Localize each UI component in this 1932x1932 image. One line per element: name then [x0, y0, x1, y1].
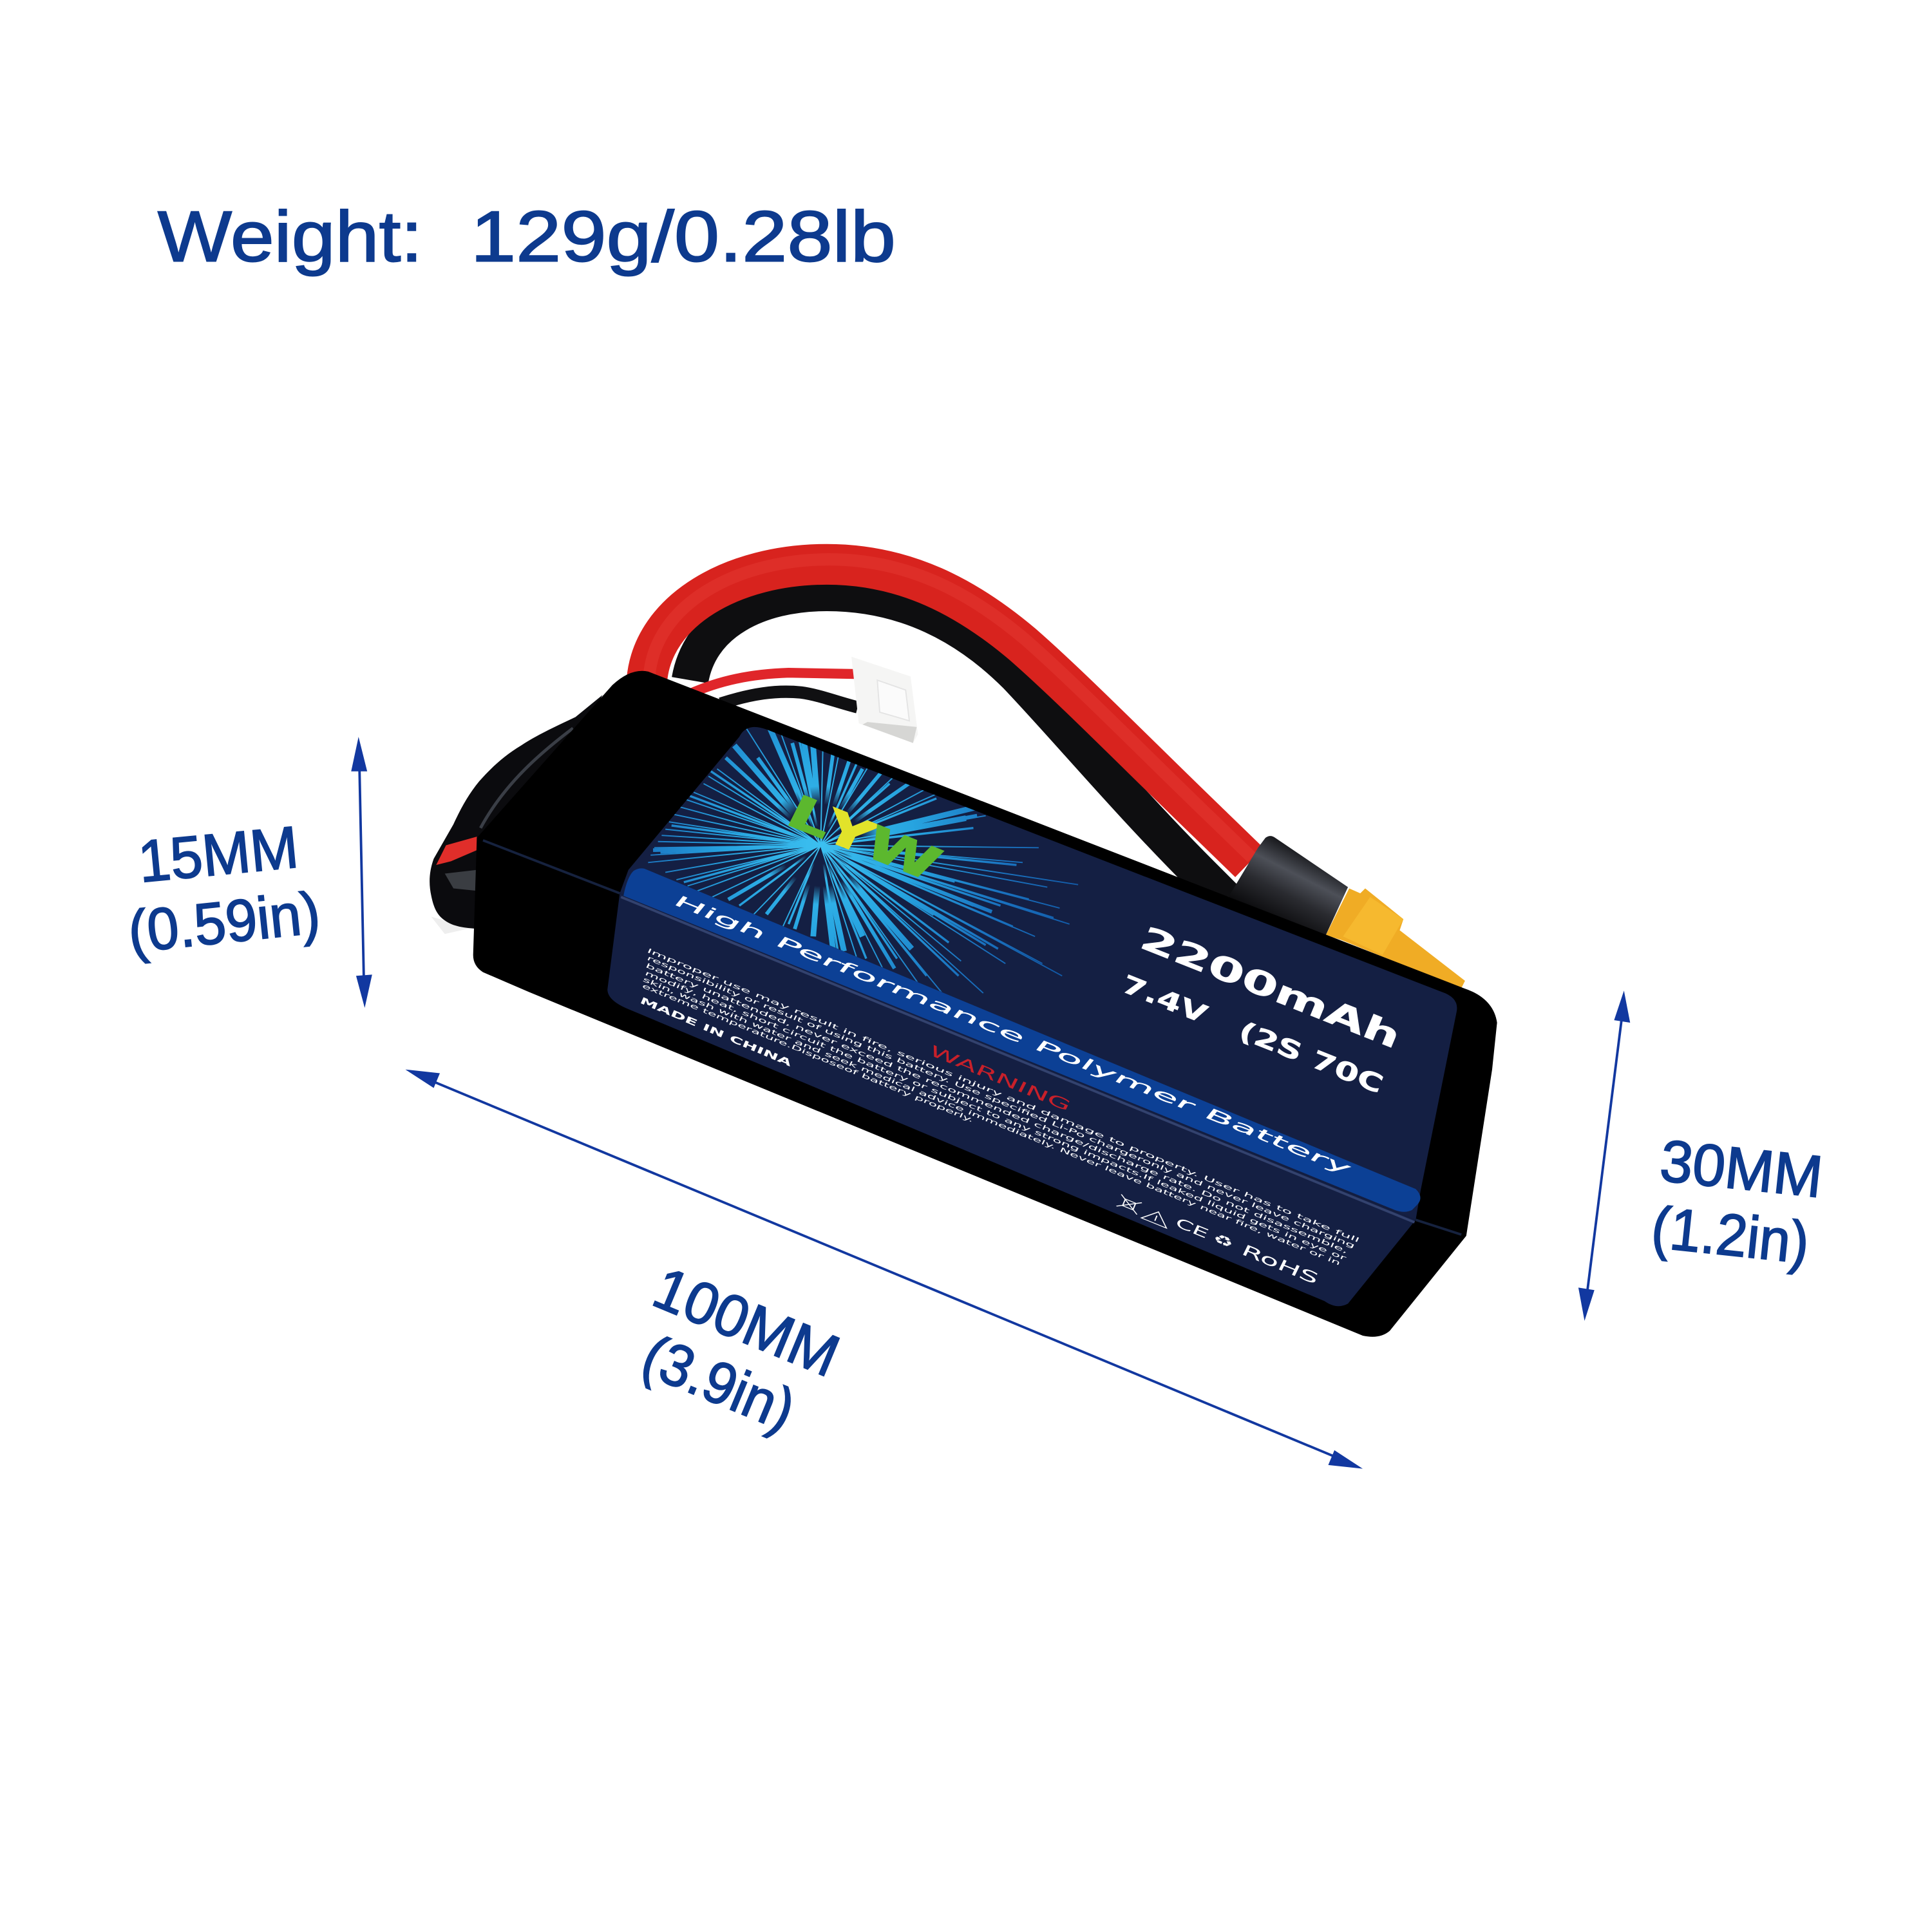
- label side face: [607, 893, 1416, 1306]
- label: (0.59in): [125, 880, 323, 965]
- warning body text: responsibility or result of using this battery. Use specified Li-Po chargeronly and never leave charging: [646, 954, 1356, 1249]
- logo LYW: LYW: [779, 786, 949, 891]
- battery black body: [473, 671, 1497, 1337]
- label: 15MM: [135, 814, 301, 895]
- icon: crossed-out bin: [1117, 1195, 1142, 1215]
- warning body text: skin, wash with water and seek medical advice immediately. Never leave battery near fire, water or in: [641, 976, 1342, 1267]
- warning body text: modify, heat, short circuit the battery or subject to any strong impacts.If leaked liquid gets in eye or: [644, 969, 1348, 1262]
- label: (1.2in): [1649, 1195, 1812, 1276]
- warning heading: WARNING: [926, 1042, 1074, 1115]
- XT60 connector: [1229, 836, 1465, 988]
- gold block: [1343, 897, 1403, 955]
- band heading: High Performance Polymer Battery: [669, 893, 1356, 1177]
- label top face: [620, 727, 1457, 1220]
- warning body text: battery unattended, never exceed the recommended charge/discharge rate. Do not disassemble,: [645, 961, 1349, 1255]
- capacity text: 2200mAh: [1135, 919, 1406, 1056]
- icon: recycle: ♻: [1211, 1230, 1236, 1251]
- label: [633, 1255, 848, 1444]
- RoHS mark: RoHS: [1238, 1241, 1321, 1288]
- label: (3.9in): [633, 1323, 804, 1444]
- balance connector: [851, 657, 918, 743]
- label: [125, 814, 323, 965]
- battery photo group: [430, 560, 1497, 1337]
- red main cable: [647, 560, 1252, 862]
- warning body text: Improper use may result in fire, serious injury and damage to property. User has to take full: [646, 947, 1361, 1244]
- dimension: 15MM: [125, 737, 372, 1008]
- label: [1649, 1128, 1826, 1276]
- label: 30MM: [1657, 1128, 1826, 1210]
- arrow: [405, 1070, 1363, 1469]
- arrow: [1578, 990, 1630, 1321]
- voltage text: 7.4V (2S 70C: [1118, 969, 1387, 1099]
- dimension: 100MM: [405, 1070, 1363, 1469]
- infographic canvas: [131, 209, 1821, 1469]
- made in china: MADE IN CHINA: [638, 995, 793, 1069]
- band fold line: [621, 897, 1414, 1222]
- left side lead cables: [430, 695, 603, 934]
- warning body text: extreme temperature.Disposeof battery properly.: [641, 982, 975, 1124]
- icon: CE mark: CE: [1173, 1215, 1211, 1242]
- starburst: [648, 726, 1078, 998]
- blue band: [623, 868, 1421, 1212]
- black main cable: [690, 592, 1226, 900]
- arrow: [351, 737, 372, 1008]
- label: 100MM: [645, 1255, 848, 1390]
- gold body: [1326, 888, 1465, 988]
- icon: warning triangle: [1141, 1207, 1171, 1228]
- title: weight: [158, 197, 896, 277]
- title: weight: 129g/0.28lb: [471, 197, 896, 277]
- title: weight: Weight:: [158, 197, 422, 277]
- sleeve: [1229, 836, 1348, 935]
- balance lead wires: [690, 673, 858, 707]
- dimension: 30MM: [1578, 990, 1826, 1321]
- fold highlight: [483, 840, 1461, 1235]
